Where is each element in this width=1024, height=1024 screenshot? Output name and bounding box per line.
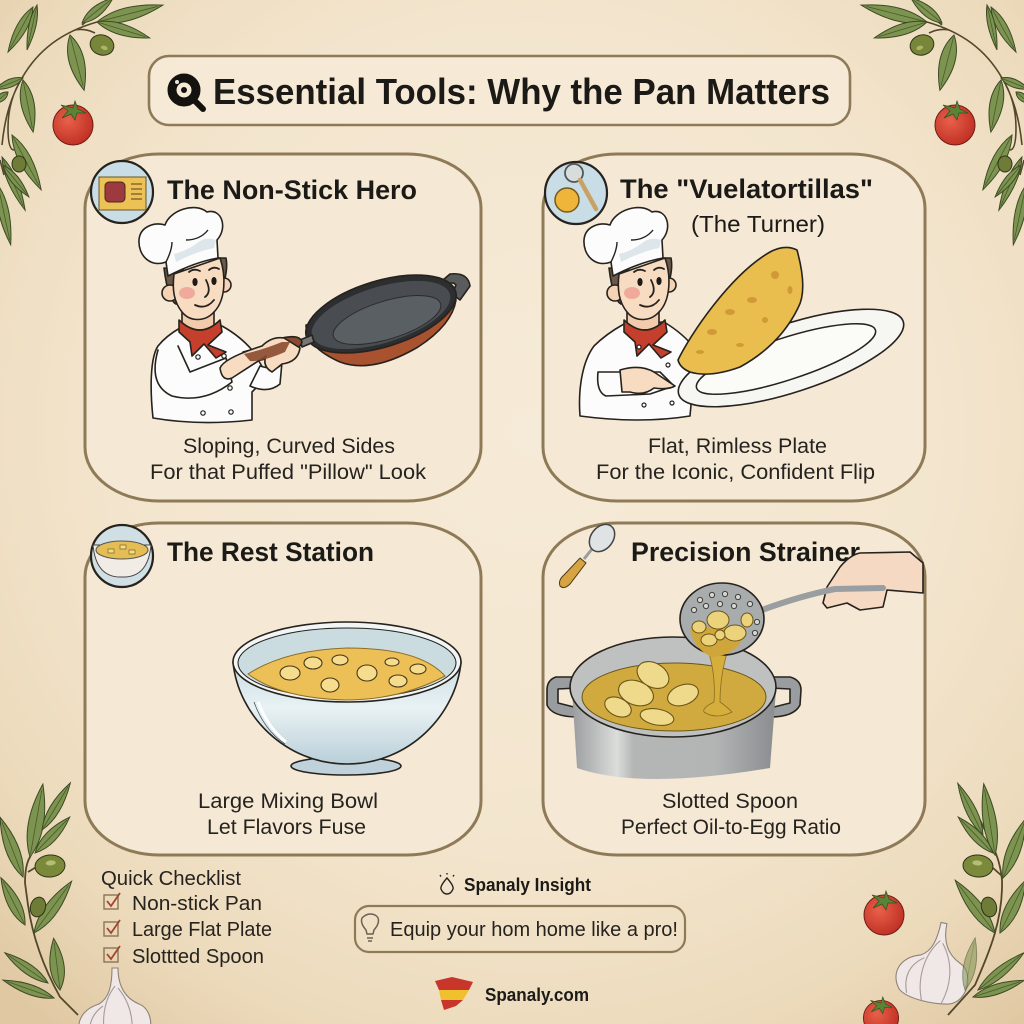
icon: spoon <box>560 519 620 588</box>
hand <box>823 552 923 610</box>
omelette <box>678 247 803 374</box>
icon: magnifier <box>172 78 203 109</box>
decoration: bottom-right tomato 2 <box>863 997 899 1024</box>
decoration: bottom-right garlic <box>892 916 979 1009</box>
decoration: bottom-left garlic <box>79 968 151 1024</box>
decoration: bottom-left olive branch <box>0 780 78 1015</box>
illustration: mixing bowl <box>233 622 461 775</box>
description <box>621 790 841 839</box>
hand <box>220 338 300 379</box>
description <box>596 435 875 484</box>
title banner <box>149 56 850 125</box>
icon: Spain map flag <box>435 977 473 1010</box>
insight label: Spanaly Insight <box>464 875 591 895</box>
illustration: pot with slotted spoon <box>547 552 923 779</box>
plate <box>668 289 914 427</box>
description <box>150 435 427 484</box>
panel: The Rest Station <box>85 523 481 855</box>
item: slotted spoon: Slottted Spoon <box>132 946 264 968</box>
panel: The Non-Stick Hero <box>85 154 481 501</box>
item: non-stick pan: Non-stick Pan <box>132 893 262 915</box>
icon: light bulb <box>362 914 378 941</box>
illustration: chef with plate and omelette <box>580 208 914 427</box>
decoration: top-right olive branch <box>860 0 1024 246</box>
footer brand <box>435 977 589 1010</box>
panel: Precision Strainer <box>543 519 925 855</box>
description: Perfect Oil-to-Egg Ratio <box>621 816 841 839</box>
description: Flat, Rimless Plate <box>648 435 827 458</box>
decoration: top-left tomato <box>53 101 93 145</box>
description <box>198 790 378 839</box>
title text: Essential Tools: Why the Pan Matters <box>213 71 830 112</box>
heading: Precision Strainer <box>631 537 860 567</box>
decoration: bottom-right tomato 1 <box>864 891 904 935</box>
footer brand: Spanaly.com <box>485 985 589 1005</box>
dripping oil <box>704 650 732 716</box>
quick checklist <box>101 868 272 968</box>
icon: spoon and egg <box>545 162 607 224</box>
icon: sparkle drop <box>440 873 454 894</box>
icon: recipe card <box>91 161 153 223</box>
decoration: top-right tomato <box>935 101 975 145</box>
decoration: top-left olive branch <box>0 0 164 246</box>
heading: The Non-Stick Hero <box>167 175 417 205</box>
icon: small bowl <box>91 525 153 587</box>
heading: The Rest Station <box>167 537 374 567</box>
description: Large Mixing Bowl <box>198 790 378 813</box>
item: large flat plate: Large Flat Plate <box>132 919 272 941</box>
illustration: chef with pan <box>139 208 470 423</box>
slotted spoon <box>680 583 883 657</box>
description: Sloping, Curved Sides <box>183 435 395 458</box>
description: For the Iconic, Confident Flip <box>596 461 875 484</box>
subheading: (The Turner) <box>691 211 825 237</box>
description: Let Flavors Fuse <box>207 816 366 839</box>
decoration: faded leaf over garlic <box>959 937 981 991</box>
heading: The "Vuelatortillas" <box>620 174 873 204</box>
description: For that Puffed "Pillow" Look <box>150 461 427 484</box>
checklist heading: Quick Checklist <box>101 868 241 890</box>
decoration: bottom-right olive branch <box>948 781 1024 1015</box>
panel: The Vuelatortillas <box>543 154 925 501</box>
insight callout <box>355 906 685 952</box>
insight callout: Equip your hom home like a pro! <box>390 919 678 941</box>
description: Slotted Spoon <box>662 790 798 813</box>
frying pan <box>242 260 470 368</box>
